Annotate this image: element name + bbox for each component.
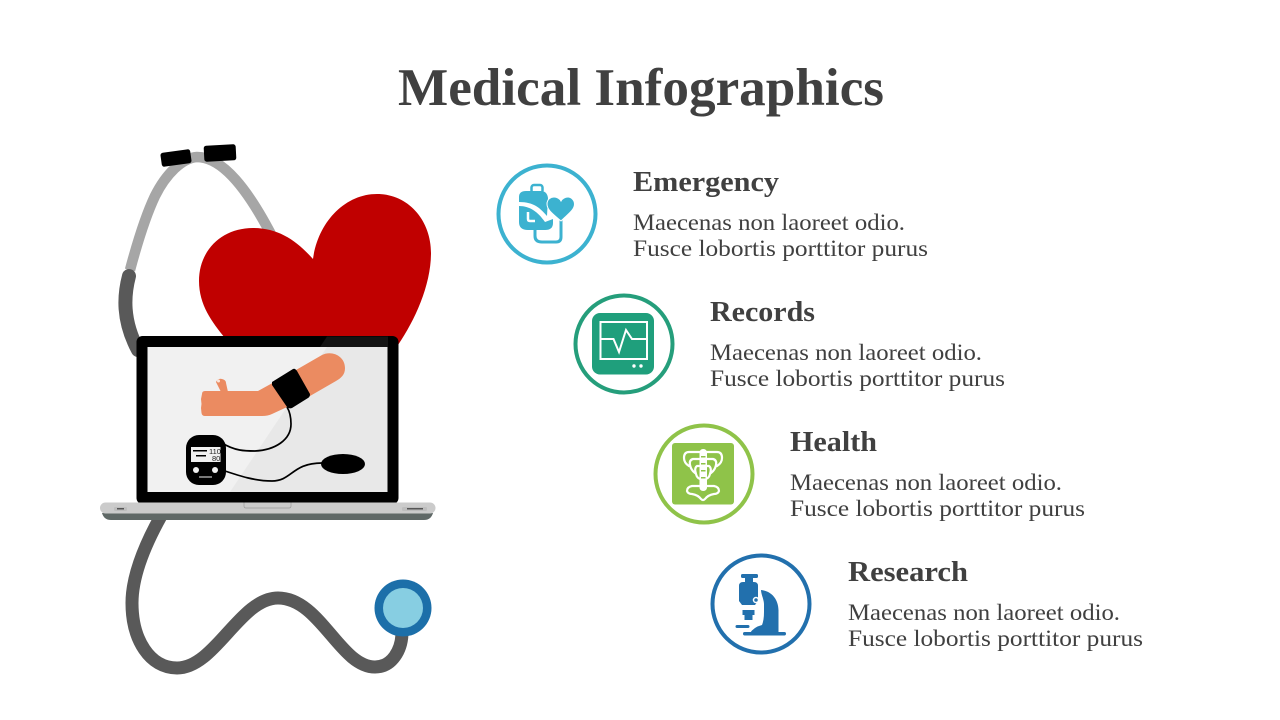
item: Health — [656, 426, 1085, 522]
laptop screen — [148, 347, 388, 492]
item: Emergency — [498, 166, 928, 262]
item: Records — [576, 296, 1005, 392]
text block: Maecenas non laoreet odio. — [790, 470, 1062, 495]
text block: Fusce lobortis porttitor purus — [790, 496, 1085, 521]
text block: Fusce lobortis porttitor purus — [710, 366, 1005, 391]
stethoscope upper tube — [130, 157, 276, 270]
heading: Health — [790, 427, 877, 458]
item: Research — [712, 556, 1143, 652]
icon: spine and ribs x-ray — [656, 426, 752, 522]
blood pressure cuff — [272, 369, 310, 408]
heading: Records — [710, 297, 815, 328]
icon: heart monitor — [576, 296, 672, 392]
monitor device: 80 — [212, 454, 220, 463]
icon: microscope — [712, 556, 810, 652]
title: Medical Infographics — [398, 59, 884, 117]
heading: Emergency — [633, 167, 779, 198]
chest piece — [374, 580, 432, 636]
monitor device — [186, 435, 226, 485]
cables — [222, 407, 322, 481]
text block: Maecenas non laoreet odio. — [848, 600, 1120, 625]
text block: Fusce lobortis porttitor purus — [848, 626, 1143, 651]
stethoscope ear tips — [160, 144, 236, 167]
text block — [790, 470, 1085, 521]
stethoscope dark tube upper — [125, 276, 138, 350]
text block: Maecenas non laoreet odio. — [633, 210, 905, 235]
inflation bulb — [321, 454, 365, 474]
heading: Research — [848, 557, 968, 588]
laptop bezel — [136, 336, 398, 504]
text block — [848, 600, 1143, 651]
monitor device: 110 — [209, 447, 221, 456]
laptop base — [100, 502, 436, 520]
text block — [633, 210, 928, 261]
arm — [201, 353, 345, 416]
heart — [199, 194, 431, 420]
icon: IV bag and heart — [498, 166, 596, 262]
stethoscope lower tube — [132, 516, 402, 668]
text block: Fusce lobortis porttitor purus — [633, 236, 928, 261]
text block — [710, 340, 1005, 391]
laptop — [100, 336, 436, 520]
illustration: stethoscope, heart and laptop — [100, 144, 436, 668]
text block: Maecenas non laoreet odio. — [710, 340, 982, 365]
